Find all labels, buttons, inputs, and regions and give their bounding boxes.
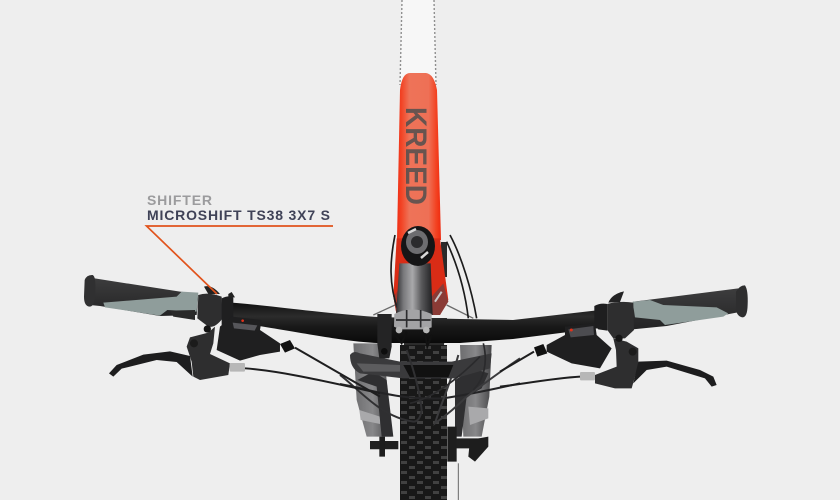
right grip xyxy=(633,285,748,329)
cable bundle xyxy=(340,350,422,422)
stem top cap xyxy=(401,226,435,266)
shift paddle xyxy=(608,291,624,303)
shifter pod xyxy=(217,317,280,361)
fork crown xyxy=(350,352,492,378)
brand text on tube: KREED xyxy=(399,107,432,205)
callout label: component model: MICROSHIFT TS38 3X7 S xyxy=(147,207,330,223)
left grip xyxy=(84,275,198,320)
brake lever blade xyxy=(109,351,193,377)
shifter pod xyxy=(547,323,612,368)
callout label: component type: SHIFTER xyxy=(147,192,212,208)
right grip and controls xyxy=(500,285,748,388)
frame: red top tube xyxy=(397,73,441,240)
left grip and controls xyxy=(84,275,380,397)
handlebar xyxy=(222,302,600,343)
cables xyxy=(500,352,580,387)
fork leg left xyxy=(353,343,392,437)
callout leader line xyxy=(146,226,333,294)
brake lever body xyxy=(187,327,230,380)
cables xyxy=(245,348,380,397)
brake and shift cables at stem xyxy=(391,235,477,318)
grip clamps xyxy=(607,302,634,338)
frame: white top tube xyxy=(400,0,436,85)
grip clamps xyxy=(197,294,223,327)
bar band xyxy=(377,314,392,358)
fork leg right xyxy=(460,345,492,437)
fork and brake hardware xyxy=(340,343,520,500)
brake lever blade xyxy=(633,361,717,387)
cable barrel xyxy=(580,372,595,380)
stem xyxy=(377,263,433,358)
cable barrel xyxy=(230,363,245,372)
callout xyxy=(146,192,333,294)
stem body xyxy=(396,263,433,315)
front tire xyxy=(400,242,447,500)
connector xyxy=(534,344,547,357)
brake lever body xyxy=(595,338,638,388)
shift paddle xyxy=(204,286,220,294)
faceplate clamp xyxy=(394,309,432,329)
frame lower: red tube behind stem and cables xyxy=(373,235,477,318)
connector xyxy=(280,340,295,353)
axle hub xyxy=(370,438,480,449)
